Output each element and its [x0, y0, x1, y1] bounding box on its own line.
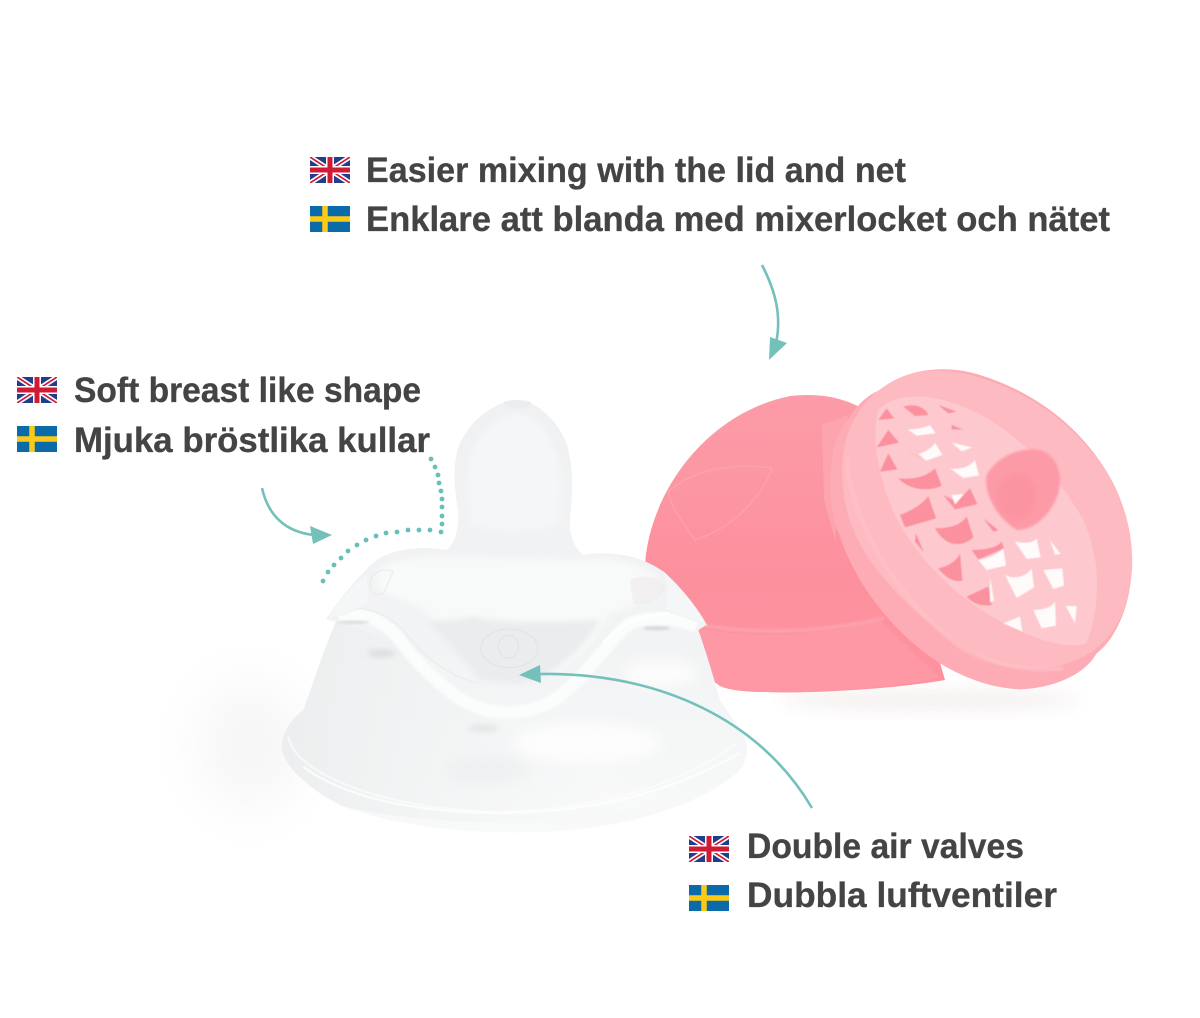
- product: silicone nipple: [282, 400, 747, 832]
- nipple teat highlight: [469, 413, 561, 531]
- label: easier mixing: Easier mixing with the lid and net: [366, 151, 906, 190]
- net: [875, 396, 1097, 645]
- label: double air valves: Dubbla luftventiler: [747, 876, 1057, 915]
- soft shading spots: [368, 649, 396, 657]
- arrow: to breast shape: [262, 488, 332, 544]
- product: pink mixer cup: [645, 395, 945, 692]
- soft shadows: [195, 680, 1080, 810]
- icon: Swedish flag: [17, 426, 57, 452]
- icon: Swedish flag: [689, 885, 729, 911]
- label: soft breast like shape: [17, 371, 430, 460]
- net holes pink: [877, 405, 1004, 605]
- arrow: to mixer lid: [762, 265, 787, 360]
- base rim: [288, 737, 737, 812]
- product: lid with net: [830, 369, 1132, 689]
- white band: [338, 615, 697, 713]
- flange tips: [327, 573, 370, 619]
- dome side shading: [282, 622, 670, 822]
- icon: UK flag: [310, 157, 350, 183]
- lid centre knob: [986, 449, 1060, 530]
- net holes white: [907, 425, 1077, 631]
- arrow: to air valve: [519, 665, 812, 808]
- lid outer ring: [830, 369, 1132, 689]
- dotted outline: breast shape: [321, 457, 444, 583]
- label: easier mixing: Enklare att blanda med mixerlocket och nätet: [366, 200, 1110, 239]
- label: double air valves: [689, 827, 1057, 915]
- label: soft breast like shape: Soft breast like shape: [74, 371, 421, 410]
- icon: UK flag: [17, 377, 57, 403]
- icon: UK flag: [689, 836, 729, 862]
- label: soft breast like shape: Mjuka bröstlika kullar: [74, 421, 430, 460]
- label: easier mixing: [310, 151, 1110, 239]
- air valve: [481, 629, 538, 668]
- nipple flange: [377, 557, 660, 673]
- icon: Swedish flag: [310, 206, 350, 232]
- label: double air valves: Double air valves: [747, 827, 1024, 866]
